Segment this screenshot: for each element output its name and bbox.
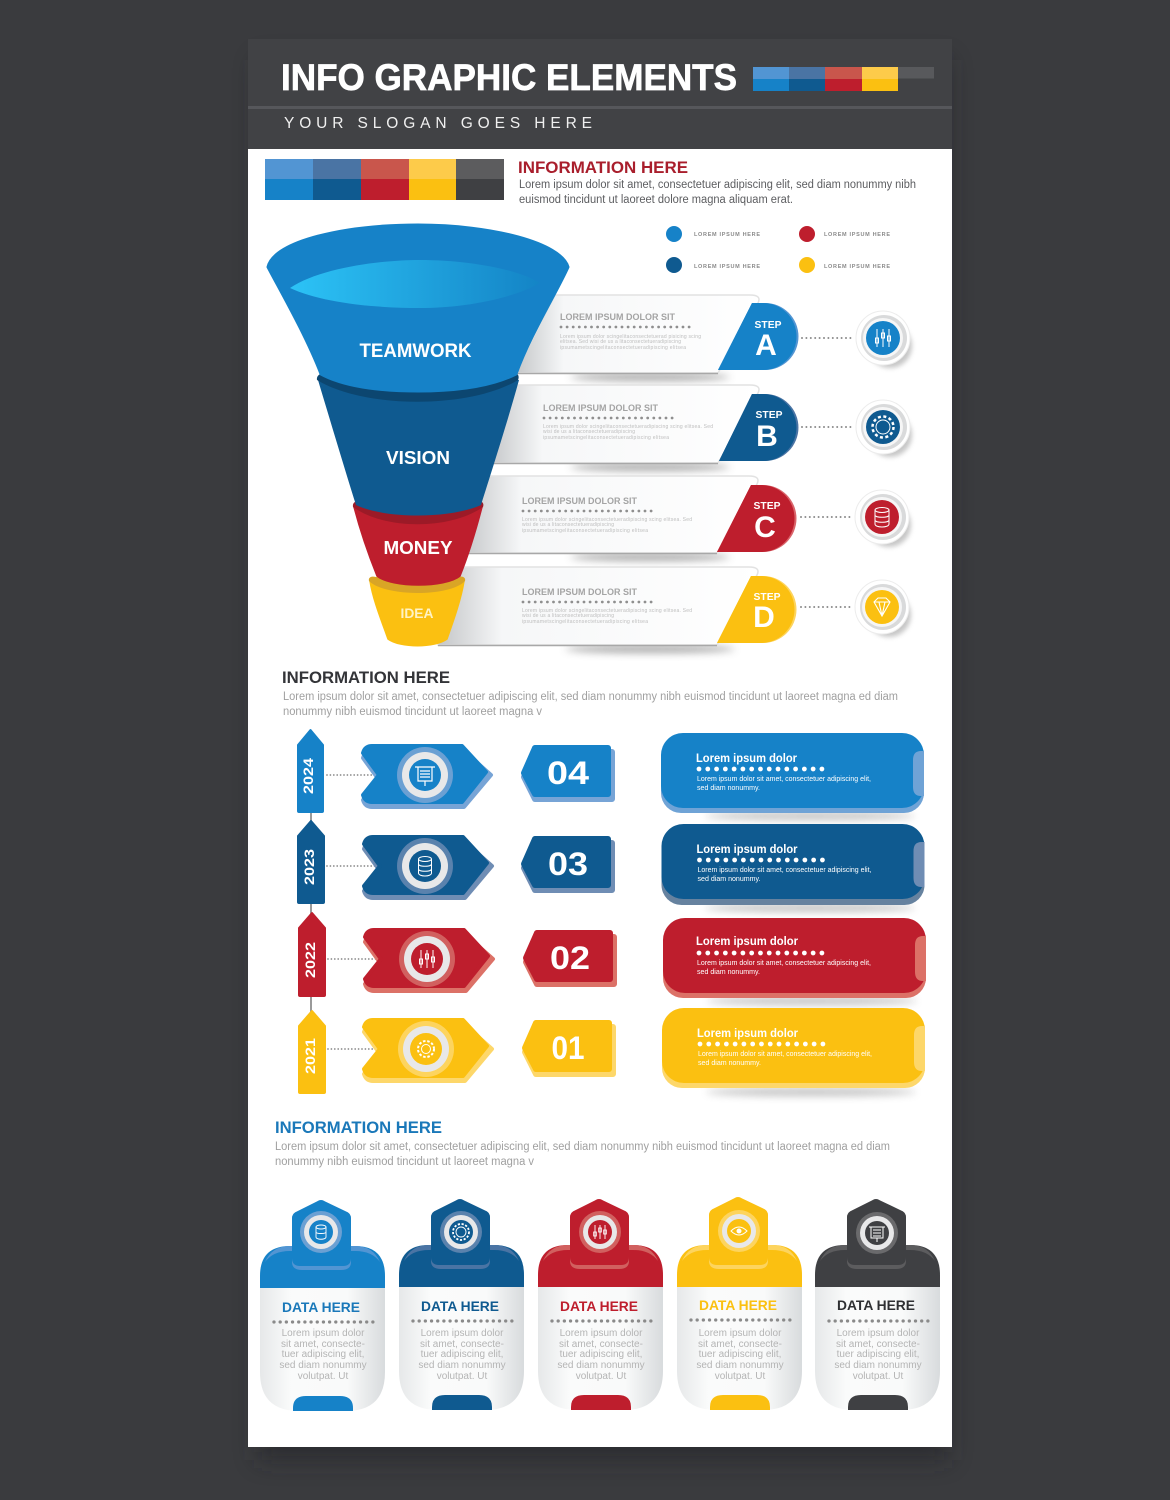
- section text: [275, 1141, 890, 1168]
- number tag 04: [524, 748, 612, 799]
- info box 1: sed diam nonummy.: [697, 785, 760, 792]
- information text: Lorem ipsum dolor sit amet, consectetuer adipiscing elit, sed diam nonummy nibh: [519, 179, 916, 191]
- step card A: [515, 295, 798, 381]
- data card blue: Lorem ipsum dolor: [282, 1328, 365, 1339]
- data card navy: volutpat. Ut: [437, 1371, 488, 1382]
- step card C: [462, 476, 796, 561]
- information text: [519, 179, 916, 206]
- data card red: Lorem ipsum dolor: [560, 1328, 643, 1339]
- timeline tag 2021: [299, 1011, 325, 1093]
- panel shadow: [258, 60, 948, 1460]
- funnel: money: [353, 496, 483, 585]
- data card blue: [260, 1201, 385, 1411]
- data card navy: tuer adipiscing elit,: [421, 1349, 503, 1360]
- step card C: Lorem ipsum dolor scingelitaconsectetueradipiscing scing elitsea. Sed: [522, 517, 692, 523]
- number tag 04: 04: [547, 755, 589, 791]
- data card dark: sit amet, consecte-: [836, 1339, 920, 1350]
- timeline connector: [310, 810, 312, 1012]
- step card A: A: [755, 329, 777, 362]
- arrow 2024 with icon: [363, 746, 491, 807]
- data card red: volutpat. Ut: [576, 1371, 627, 1382]
- funnel: teamwork: [268, 225, 568, 391]
- funnel: [268, 225, 568, 646]
- info box 4: [662, 1008, 925, 1096]
- data card navy: DATA HERE: [421, 1298, 499, 1314]
- number tag 03: 03: [548, 846, 588, 882]
- step card A: Lorem ipsum dolor scingelitaconsectetuerad pisicing scing: [560, 334, 701, 340]
- data card yellow: Lorem ipsum dolor: [699, 1328, 782, 1339]
- data card blue: volutpat. Ut: [298, 1371, 349, 1382]
- arrow 2023 with icon: [364, 837, 492, 898]
- step card D: D: [753, 601, 775, 634]
- colour swatch bar: [265, 159, 504, 200]
- data card yellow: DATA HERE: [699, 1297, 777, 1313]
- step card A: ipsumametscingelitaconsectetueradipiscing elitsea: [560, 345, 686, 351]
- data card navy: Lorem ipsum dolor: [421, 1328, 504, 1339]
- step card B: STEP: [756, 410, 783, 421]
- data card yellow: sit amet, consecte-: [698, 1339, 782, 1350]
- step card D: ipsumametscingelitaconsectetueradipiscing elitsea: [522, 619, 648, 625]
- section text: Lorem ipsum dolor sit amet, consectetuer adipiscing elit, sed diam nonummy nibh euismod tincidunt ut laoreet magna ed diam: [283, 691, 898, 703]
- information heading red: INFORMATION HERE: [518, 158, 688, 177]
- connector 2024: [327, 774, 375, 776]
- info box 3: [663, 918, 926, 1005]
- arrow 2022 with icon: [365, 930, 493, 991]
- funnel: idea: IDEA: [400, 605, 434, 621]
- data card navy: sed diam nonummy: [418, 1360, 506, 1371]
- data card dark: DATA HERE: [837, 1297, 915, 1313]
- info box 4: Lorem ipsum dolor sit amet, consectetuer adipiscing elit,: [698, 1051, 872, 1058]
- step card B: B: [756, 420, 778, 453]
- info box 1: Lorem ipsum dolor sit amet, consectetuer adipiscing elit,: [697, 776, 871, 783]
- data card red: [538, 1200, 663, 1410]
- info box 1: Lorem ipsum dolor: [696, 751, 797, 765]
- step card C: ipsumametscingelitaconsectetueradipiscing elitsea: [522, 528, 648, 534]
- header colour swatches: [753, 67, 934, 91]
- info box 4: sed diam nonummy.: [698, 1060, 761, 1067]
- step card D: STEP: [754, 592, 781, 603]
- icon: gear: [856, 400, 912, 457]
- section text: nonummy nibh euismod tincidunt ut laoreet magna v: [283, 706, 542, 718]
- number tag 02: 02: [550, 940, 590, 976]
- data card yellow: sed diam nonummy: [696, 1360, 784, 1371]
- legend: LOREM IPSUM HERE: [694, 232, 760, 238]
- data card red: tuer adipiscing elit,: [560, 1349, 642, 1360]
- data card blue: DATA HERE: [282, 1299, 360, 1315]
- step card B: LOREM IPSUM DOLOR SIT: [543, 403, 658, 414]
- step card D: Lorem ipsum dolor scingelitaconsectetueradipiscing scing elitsea. Sed: [522, 608, 692, 614]
- info box 3: sed diam nonummy.: [697, 969, 760, 976]
- step card B: Lorem ipsum dolor scingelitaconsectetueradipiscing scing elitsea. Sed: [543, 424, 713, 430]
- connector dots A: [802, 337, 853, 339]
- timeline tag 2023: [298, 821, 324, 903]
- step card A: elitsea. Sed wisi de us a litaconsectetueradipiscing: [560, 339, 681, 345]
- data card blue: sit amet, consecte-: [281, 1339, 365, 1350]
- info box 1: [661, 733, 924, 820]
- data card red: DATA HERE: [560, 1298, 638, 1314]
- connector 2022: [328, 958, 377, 960]
- funnel: money: MONEY: [384, 538, 452, 558]
- data card navy: [399, 1200, 524, 1410]
- connector dots D: [801, 606, 852, 608]
- data card red: sit amet, consecte-: [559, 1339, 643, 1350]
- number tag 01: 01: [552, 1030, 584, 1066]
- data card yellow: [677, 1198, 802, 1410]
- arrow 2021 with icon: [364, 1020, 492, 1081]
- data card red: sed diam nonummy: [557, 1360, 645, 1371]
- step card D: wisi de us a litaconsectetueradipiscing: [522, 613, 614, 619]
- data card dark: sed diam nonummy: [834, 1360, 922, 1371]
- step card A: STEP: [755, 320, 782, 331]
- info box 3: Lorem ipsum dolor sit amet, consectetuer adipiscing elit,: [697, 960, 871, 967]
- funnel: vision: VISION: [386, 448, 450, 468]
- timeline tag 2022: [299, 913, 325, 996]
- section text: [283, 691, 898, 718]
- section text: nonummy nibh euismod tincidunt ut laoreet magna v: [275, 1156, 534, 1168]
- info box 2: sed diam nonummy.: [698, 876, 761, 883]
- step card A: LOREM IPSUM DOLOR SIT: [560, 312, 675, 323]
- header band: [248, 39, 952, 149]
- legend: LOREM IPSUM HERE: [824, 232, 890, 238]
- step card B: wisi de us a litaconsectetueradipiscing: [543, 429, 635, 435]
- step card C: C: [754, 511, 776, 544]
- info box 2: [662, 824, 924, 912]
- info box 2: Lorem ipsum dolor: [696, 842, 798, 856]
- timeline tag 2022: 2022: [302, 942, 318, 978]
- connector dots C: [801, 516, 852, 518]
- section heading: information here: INFORMATION HERE: [282, 668, 450, 687]
- data card blue: tuer adipiscing elit,: [282, 1349, 364, 1360]
- data card yellow: tuer adipiscing elit,: [699, 1349, 781, 1360]
- data card blue: sed diam nonummy: [279, 1360, 367, 1371]
- number tag 03: [524, 839, 612, 890]
- funnel: vision: [317, 373, 519, 516]
- title: INFO GRAPHIC ELEMENTS: [281, 56, 737, 98]
- information text: euismod tincidunt ut laoreet dolore magna aliquam erat.: [519, 194, 793, 206]
- legend: [666, 226, 890, 273]
- white panel: [248, 149, 952, 1447]
- icon: diamond: [855, 580, 911, 637]
- data card dark: [815, 1200, 940, 1410]
- legend: LOREM IPSUM HERE: [824, 264, 890, 270]
- connector 2023: [327, 865, 376, 867]
- funnel: idea: [369, 573, 465, 646]
- info box 4: Lorem ipsum dolor: [697, 1026, 798, 1040]
- step card C: wisi de us a litaconsectetueradipiscing: [522, 522, 614, 528]
- icon: sliders: [856, 311, 912, 368]
- legend: LOREM IPSUM HERE: [694, 264, 760, 270]
- data card dark: tuer adipiscing elit,: [837, 1349, 919, 1360]
- info box 2: Lorem ipsum dolor sit amet, consectetuer adipiscing elit,: [698, 867, 872, 874]
- step card C: LOREM IPSUM DOLOR SIT: [522, 496, 637, 507]
- timeline tag 2024: [298, 730, 323, 812]
- connector dots B: [802, 426, 853, 428]
- data card yellow: volutpat. Ut: [715, 1371, 766, 1382]
- step card D: LOREM IPSUM DOLOR SIT: [522, 587, 637, 598]
- section heading: information here blue: INFORMATION HERE: [275, 1118, 442, 1137]
- timeline tag 2021: 2021: [302, 1038, 318, 1074]
- number tag 01: [525, 1023, 613, 1074]
- slogan: YOUR SLOGAN GOES HERE: [284, 115, 592, 132]
- number tag 02: [526, 933, 614, 984]
- connector 2021: [328, 1048, 376, 1050]
- funnel: teamwork: TEAMWORK: [360, 341, 472, 362]
- section text: Lorem ipsum dolor sit amet, consectetuer adipiscing elit, sed diam nonummy nibh euismod tincidunt ut laoreet magna ed diam: [275, 1141, 890, 1153]
- step card B: [488, 385, 798, 471]
- data card dark: Lorem ipsum dolor: [837, 1328, 920, 1339]
- step card C: STEP: [754, 501, 781, 512]
- step card D: [438, 567, 796, 653]
- info box 3: Lorem ipsum dolor: [696, 934, 798, 948]
- data card dark: volutpat. Ut: [853, 1371, 904, 1382]
- icon: database: [855, 490, 911, 547]
- data card navy: sit amet, consecte-: [420, 1339, 504, 1350]
- timeline tag 2023: 2023: [301, 849, 317, 885]
- step card B: ipsumametscingelitaconsectetueradipiscing elitsea: [543, 435, 669, 441]
- timeline tag 2024: 2024: [300, 758, 316, 794]
